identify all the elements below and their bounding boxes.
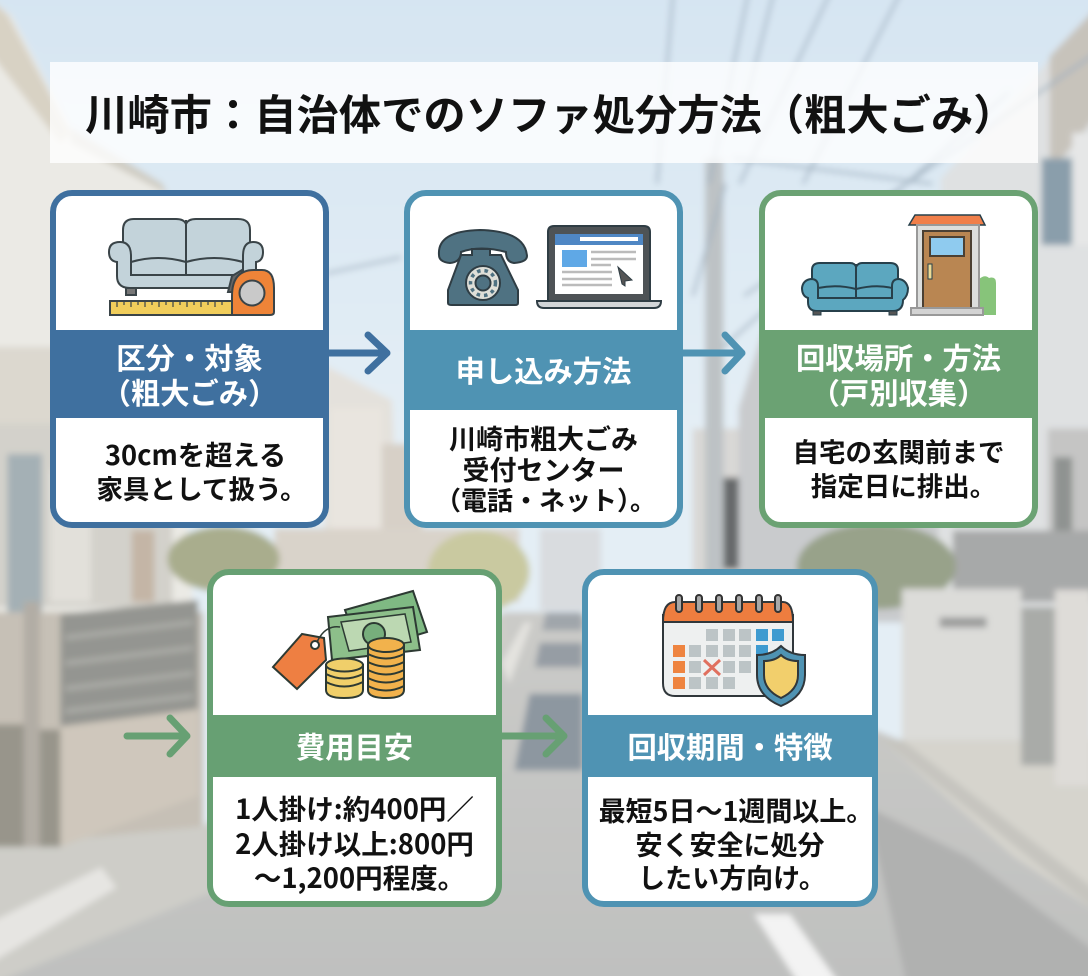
header: 区分・対象（粗大ごみ） [50,330,329,418]
icon: sofa and front door [801,214,996,316]
greenery [168,527,280,592]
header: 回収場所・方法（戸別収集）: 回収場所・方法 [796,336,1001,378]
text: body: 2人掛け以上:800円 [235,822,474,862]
arrow: step 4 to step 5 [502,718,564,754]
text: body: 1人掛け:約400円／ [235,787,474,827]
icon: telephone and laptop [438,225,662,309]
text: body [435,418,656,518]
right house [938,5,1088,622]
text: body: 安く安全に処分 [636,824,824,862]
text: body [599,790,873,896]
header: 回収場所・方法（戸別収集） [759,330,1038,418]
road [0,612,1088,976]
text: body: したい方向け。 [638,857,826,896]
text: body [235,787,474,896]
text: body: 受付センター [462,449,624,488]
left ground [0,612,203,857]
text: body [792,431,1004,504]
header: 申し込み方法 [404,330,683,410]
title band: 川崎市：自治体でのソファ処分方法（粗大ごみ） [85,82,1016,143]
text: body: 〜1,200円程度。 [254,856,465,896]
panel: 区分・対象 [50,190,329,528]
panel: 回収期間・特徴 [582,569,878,907]
header: 回収場所・方法（戸別収集）: （戸別収集） [811,371,986,413]
text: body: 自宅の玄関前まで [792,431,1004,470]
title band [50,62,1038,163]
right gate [902,589,1021,740]
arrow: into step 4 [127,718,187,754]
text: body: 川崎市粗大ごみ [449,418,638,457]
left house [0,0,193,622]
header: 費用目安: 費用目安 [296,724,413,766]
text: body: 指定日に排出。 [811,465,996,504]
far houses left [325,365,402,602]
header: 区分・対象（粗大ごみ）: 区分・対象 [116,336,263,378]
icon: calendar and shield [662,594,806,708]
arrow: step 1 to step 2 [329,335,387,371]
header: 回収期間・特徴 [582,715,878,777]
header: 費用目安 [207,715,502,777]
header: 申し込み方法: 申し込み方法 [456,348,631,390]
right far houses [693,429,764,602]
icon: sofa with tape measure [108,218,275,316]
arrow: step 2 to step 3 [683,335,742,371]
panel: 費用目安 [207,569,502,907]
panel: 申し込み方法 [404,190,683,528]
text: body: 最短5日〜1週間以上。 [599,790,873,829]
icon: money, coins and price tag [272,590,428,699]
pole and wires [705,158,723,607]
text: body [96,433,307,506]
fence left [60,600,198,726]
header: 区分・対象（粗大ごみ）: （粗大ごみ） [102,371,277,413]
panel: 回収場所・方法 [759,190,1038,528]
text: body: （電話・ネット）。 [435,481,656,518]
text: body: 30cmを超える [105,433,286,473]
text: body: 家具として扱う。 [96,468,307,506]
header: 回収期間・特徴: 回収期間・特徴 [627,724,833,766]
